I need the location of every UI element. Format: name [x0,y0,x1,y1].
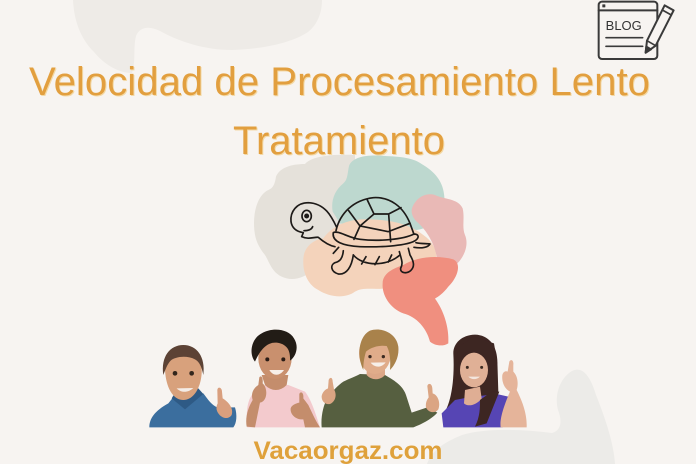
turtle shell [336,198,414,234]
icon: blog notebook and pencil: BLOG [606,18,642,33]
turtle belly [333,247,400,265]
background blob: top [73,0,322,73]
child 4: girl in purple top [442,335,527,427]
child 3: blond boy in green sweater [321,330,439,427]
turtle head and neck [291,203,337,247]
background blob: bottom right [427,370,615,464]
brain lobe: teal [332,156,445,230]
brain lobe: peach [303,219,436,296]
child 1: boy in denim shirt [149,345,236,427]
title line 1: Velocidad de Procesamiento Lento [29,60,650,104]
turtle tail [414,243,430,248]
brain lobe: pink [412,194,467,264]
icon: blog notebook and pencil [599,2,674,59]
brain illustration with turtle [254,155,467,345]
turtle front leg [332,251,353,274]
title line 1: Velocidad de Procesamiento Lento [30,61,651,105]
title line 2: Tratamiento [234,120,446,164]
brain lobe: grey [254,155,355,279]
turtle back leg [399,248,413,273]
turtle shell rim [333,232,418,247]
children giving thumbs up [149,330,527,427]
title [29,60,651,164]
turtle outline [291,198,430,274]
brain lobe: coral [383,257,458,345]
title line 2: Tratamiento [233,119,445,163]
child 2: child in pink shirt [246,330,320,427]
